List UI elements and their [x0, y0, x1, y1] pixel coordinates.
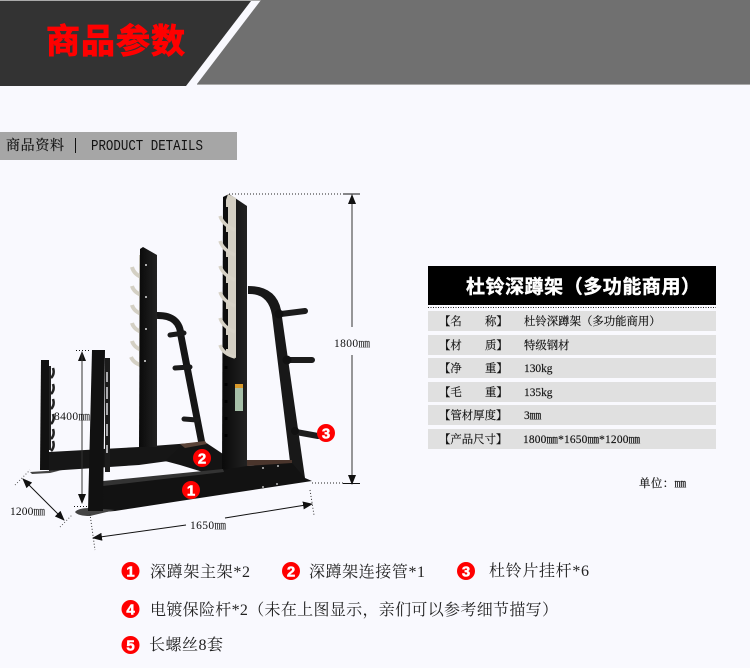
- right tall post with plate and hooks: [220, 194, 247, 472]
- dimension: 1650mm width: 1650㎜: [190, 520, 226, 532]
- spec table: [428, 266, 716, 449]
- unit note: 单位：㎜: [639, 477, 687, 490]
- legend: [122, 562, 589, 654]
- row: product size: [428, 429, 716, 449]
- dimension: 1800mm height: [229, 194, 370, 484]
- marker 3 on diagram: [317, 424, 335, 442]
- row: material: [428, 335, 716, 355]
- legend item 3: 3: [462, 564, 470, 580]
- row: net weight: 130kg: [524, 363, 553, 375]
- table heading: 杜铃深蹲架（多功能商用）: [466, 276, 700, 298]
- row: net weight: 【净: [439, 361, 462, 375]
- warning sticker: [235, 384, 243, 411]
- product diagram: squat rack: [30, 194, 318, 516]
- dimension: 1200mm depth: [10, 470, 72, 527]
- dimension: 1650mm width: [90, 490, 314, 550]
- legend item 5: 5: [126, 638, 135, 654]
- row: gross weight: [428, 382, 716, 402]
- back frame crossbar: [49, 442, 205, 471]
- legend item 5: [122, 636, 223, 654]
- row: product size: 【产品尺寸】: [439, 432, 507, 446]
- row: material: 【材: [439, 338, 462, 352]
- section bar: product details: 商品资料: [6, 138, 64, 154]
- middle arc and pegs: [157, 315, 202, 444]
- row: gross weight: 【毛: [439, 386, 462, 399]
- table heading: [428, 266, 716, 305]
- legend item 1: 深蹲架主架*2: [150, 563, 250, 581]
- legend item 3: [457, 562, 589, 580]
- legend item 3: 杜铃片挂杆*6: [489, 562, 589, 580]
- front frame: [75, 460, 312, 516]
- marker 3 on diagram: 3: [322, 426, 330, 442]
- row: net weight: [428, 358, 716, 378]
- header banner: [0, 0, 750, 86]
- row: gross weight: 重】: [485, 385, 508, 399]
- row: gross weight: 135kg: [524, 387, 553, 399]
- row: material: 特级钢材: [524, 338, 570, 352]
- marker 1 on diagram: [182, 481, 200, 500]
- legend item 4: 电镀保险杆*2（未在上图显示，亲们可以参考细节描写）: [150, 601, 558, 619]
- legend item 2: 深蹲架连接管*1: [309, 563, 425, 581]
- row: material: 质】: [485, 338, 508, 352]
- connecting tube: [165, 442, 226, 479]
- legend item 1: [122, 562, 250, 581]
- legend item 2: 2: [287, 564, 295, 580]
- dimension: 1200mm depth: 1200㎜: [10, 506, 46, 518]
- marker 2 on diagram: 2: [198, 450, 206, 468]
- legend item 5: 长螺丝8套: [149, 636, 223, 654]
- legend item 1: 1: [126, 564, 135, 580]
- right arc and pegs: [248, 286, 318, 478]
- dimension: 1800mm height: 1800㎜: [334, 338, 370, 350]
- legend item 4: 4: [126, 602, 135, 618]
- row: name: 称】: [485, 315, 508, 328]
- row: tube thickness: [428, 405, 716, 425]
- marker 2 on diagram: [193, 449, 211, 468]
- dimension: 8400mm height: 8400㎜: [54, 411, 90, 423]
- back small post: [30, 360, 62, 474]
- row: product size: 1800㎜*1650㎜*1200㎜: [523, 434, 641, 446]
- title: 商品参数: [46, 23, 185, 61]
- middle tall post with hooks: [131, 247, 157, 447]
- row: tube thickness: 3㎜: [524, 410, 542, 422]
- row: net weight: 重】: [485, 361, 508, 375]
- row: name: 【名: [439, 315, 462, 328]
- row: name: [428, 311, 716, 331]
- dimension: 8400mm height: [54, 350, 90, 506]
- front left post: [88, 350, 110, 511]
- row: name: 杜铃深蹲架（多功能商用）: [524, 314, 661, 328]
- section bar: product details: PRODUCT DETAILS: [91, 138, 203, 155]
- row: tube thickness: 【管材厚度】: [439, 408, 507, 422]
- marker 1 on diagram: 1: [187, 482, 195, 500]
- section bar: product details: [0, 132, 237, 160]
